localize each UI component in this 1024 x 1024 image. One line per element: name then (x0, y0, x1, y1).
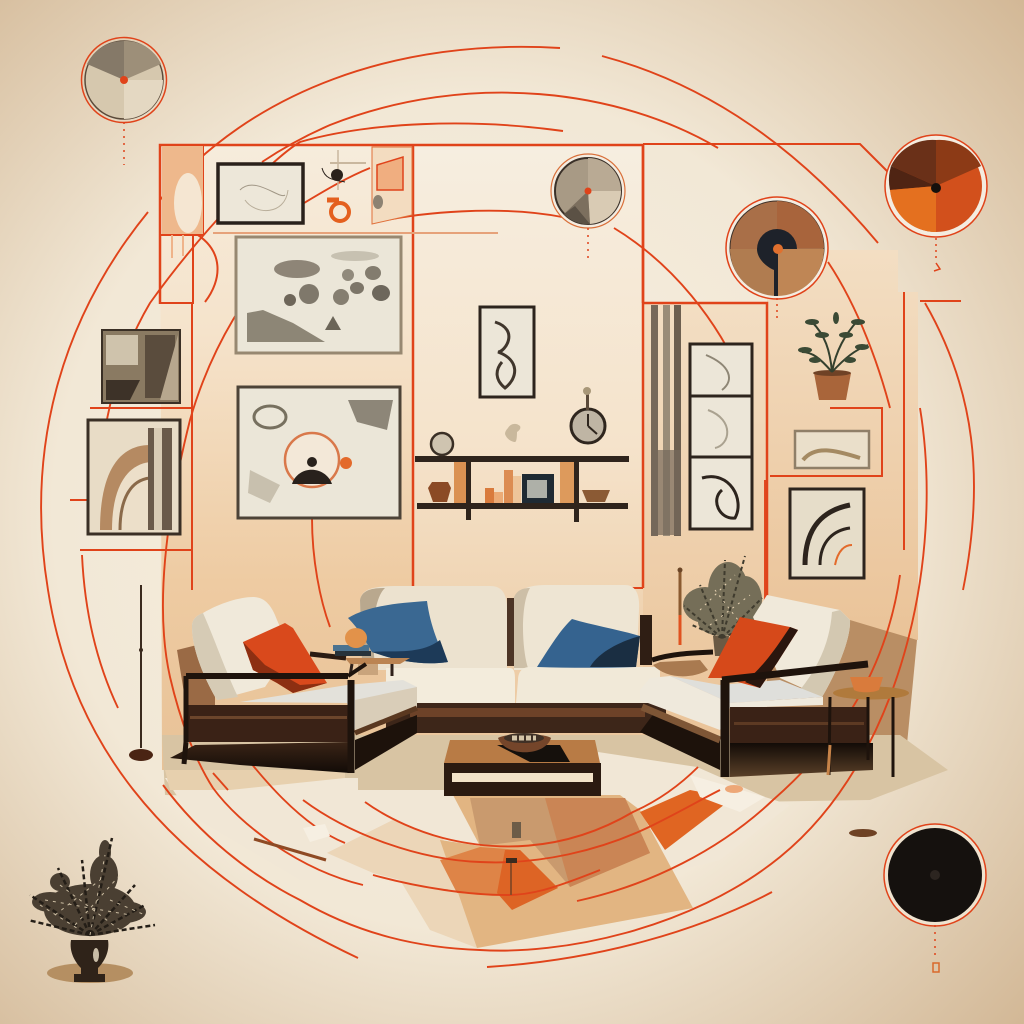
back cushion (192, 597, 290, 700)
coffee table (444, 733, 601, 796)
left floor tan (165, 770, 345, 790)
floor cream area (165, 752, 790, 880)
rug beige patch (327, 820, 443, 853)
cushion: blue left (348, 601, 448, 663)
framed art: large sketch bottom (238, 387, 400, 518)
framed art: left dark photo (102, 330, 180, 403)
potted plant bottom left (28, 838, 155, 983)
wall shelf with clock and objects (415, 387, 629, 522)
cushion: blue right (537, 619, 640, 668)
pillow (243, 623, 327, 693)
side table with books (310, 628, 410, 676)
armchair: left (170, 597, 417, 773)
wall columns (651, 305, 681, 536)
small reflection (690, 775, 765, 812)
dial: top left (82, 38, 166, 165)
potted plant on wall (798, 312, 869, 400)
orange line frames (70, 144, 961, 600)
sofa: centre section (360, 585, 666, 733)
rug tan main (440, 795, 693, 948)
frame (642, 707, 720, 740)
framed art: tall triptych (690, 344, 752, 529)
dial: top right (885, 135, 987, 271)
dial: upper right large (726, 197, 828, 318)
framed art: small landscape top (218, 164, 303, 223)
side table right with cup (828, 677, 909, 777)
seat (640, 676, 823, 730)
wood side back (177, 645, 215, 705)
rug brown strip (470, 798, 650, 887)
framed art: left arch (88, 420, 180, 534)
panel: floor and rug (162, 735, 948, 948)
base (730, 707, 867, 743)
back cushion (753, 595, 850, 697)
pillow (708, 617, 798, 688)
large lower sweep (163, 408, 927, 951)
base (185, 705, 350, 742)
floor base beige (162, 735, 948, 802)
dial: centre wall (551, 154, 625, 262)
dial: bottom right black (884, 824, 986, 972)
plant behind right seat (678, 556, 762, 656)
floor lamp stand left (129, 585, 153, 761)
framed art: curved sketch right (790, 489, 864, 578)
framed art: small landscape right (795, 431, 869, 468)
armchair: right (640, 595, 873, 777)
framed art: large sketch top (236, 237, 401, 353)
rug orange shapes (440, 847, 558, 895)
inner left sweep (163, 243, 363, 885)
floor objects (254, 822, 877, 895)
black teardrop (757, 229, 797, 296)
framed art: centre small portrait (480, 307, 534, 397)
lower dark shadow under seat (640, 712, 720, 770)
panel: room walls (160, 145, 918, 770)
top left wall ornaments (162, 146, 412, 258)
frame (186, 673, 348, 679)
shadow beneath (170, 742, 350, 773)
seat (240, 680, 417, 730)
